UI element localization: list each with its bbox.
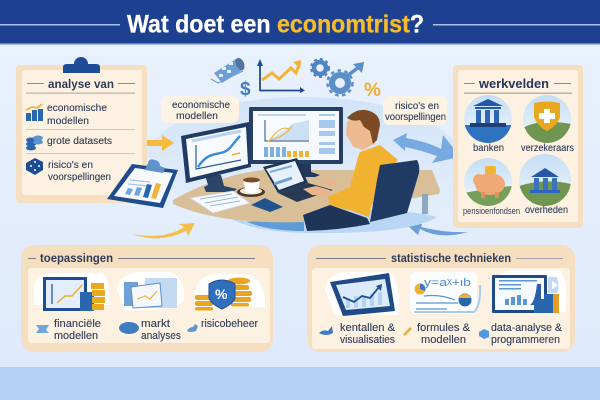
icon: verzekeraars <box>523 95 571 143</box>
arrow: blue bottom <box>407 224 468 235</box>
header bar <box>0 0 600 44</box>
text: formules & modellen: modellen <box>421 334 466 346</box>
text: economische modellen: economische <box>47 102 107 114</box>
text: markt analyses: analyses <box>141 330 181 342</box>
text: financiele modellen: financiële <box>54 318 101 330</box>
icon: tablet chart <box>325 272 399 316</box>
central background blob <box>146 97 470 234</box>
text: banken: banken <box>473 142 504 154</box>
icon: formulas: y=aᵡ+ιb <box>424 277 471 289</box>
arrow: yellow to monitor <box>147 135 174 151</box>
heading: toepassingen: toepassingen <box>40 251 113 265</box>
icon: shield and coins: % <box>215 286 228 302</box>
text: data-analyse & programmeren <box>479 322 563 346</box>
icons above desk <box>211 56 381 101</box>
icon: formulas <box>410 272 480 314</box>
text: markt analyses <box>119 318 181 342</box>
callout: risico's en voorspellingen <box>383 96 447 125</box>
icon: bar chart <box>26 104 43 121</box>
floor shadow <box>230 210 437 233</box>
callout: economische modellen: economische <box>172 100 230 111</box>
heading: werkvelden: werkvelden <box>478 76 549 91</box>
text: financiele modellen <box>36 318 101 342</box>
text: grote datasets: grote datasets <box>47 135 112 147</box>
text: overheden: overheden <box>525 204 568 216</box>
text: markt analyses: markt <box>141 318 170 330</box>
icon: dollar: $ <box>240 79 251 100</box>
chair <box>370 160 419 222</box>
panel: toepassingen <box>21 245 273 352</box>
text: financiele modellen: modellen <box>54 330 98 342</box>
clipboard <box>107 159 178 208</box>
icon: overheden <box>519 154 571 206</box>
icon: percent: % <box>364 80 381 101</box>
icon: gear with arrow <box>328 62 364 96</box>
icon: pensioenfondsen <box>464 158 512 206</box>
monitor left <box>181 122 251 192</box>
text: kentallen & visualisaties: visualisaties <box>340 334 395 346</box>
icon: data stack <box>26 136 43 150</box>
bottom band <box>0 367 600 400</box>
icon: market analyses <box>117 272 184 310</box>
icon: dashboard <box>492 270 566 313</box>
icon: shield and coins <box>195 274 265 310</box>
heading: analyse van: analyse van <box>48 77 114 91</box>
panel: werkvelden <box>453 65 583 228</box>
text: kentallen & visualisaties <box>319 322 396 346</box>
panel: analyse van: voorspellingen <box>48 171 111 183</box>
desk <box>173 170 440 222</box>
text: data-analyse & programmeren: programmeren <box>491 334 560 346</box>
icon: small gear <box>311 59 329 77</box>
icon: data cylinder <box>211 56 246 83</box>
icon: financial chart <box>34 273 110 311</box>
icon: banken <box>464 95 512 143</box>
arrow: yellow bottom <box>132 223 195 238</box>
text: verzekeraars: verzekeraars <box>521 143 574 154</box>
text: risico's en voorspellingen: risico's en <box>48 159 93 171</box>
heading: statistische technieken: statistische technieken <box>391 251 511 265</box>
monitor right <box>249 107 343 177</box>
icon: dice <box>26 158 43 175</box>
text: kentallen & visualisaties: kentallen & <box>340 322 396 334</box>
text: formules & modellen <box>404 322 471 346</box>
text: pensioenfondsen: pensioenfondsen <box>463 206 520 216</box>
callout: risico's en voorspellingen: risico's en <box>395 101 439 112</box>
icon: line chart <box>257 59 305 93</box>
laptop <box>263 158 333 202</box>
text: risicobeheer: risicobeheer <box>201 318 258 330</box>
person head <box>346 110 380 150</box>
panel: statistische technieken <box>307 245 575 352</box>
hands <box>303 179 338 196</box>
desk scene <box>173 107 440 233</box>
shirt <box>328 145 398 217</box>
title: Wat doet een economtrist? <box>127 10 424 38</box>
calculator <box>251 198 283 212</box>
callout: economische modellen: modellen <box>176 111 218 122</box>
coffee cup <box>237 178 265 197</box>
callout: risico's en voorspellingen: voorspellingen <box>385 112 446 123</box>
text: data-analyse & programmeren: data-analyse & <box>491 322 563 334</box>
papers <box>190 191 250 213</box>
panel: analyse van: modellen <box>47 115 89 127</box>
text: formules & modellen: formules & <box>417 322 471 334</box>
text: risicobeheer <box>187 318 258 332</box>
panel: analyse van <box>16 57 147 203</box>
arrow: blue double <box>393 133 455 163</box>
clipboard clip <box>63 57 100 73</box>
callout: economische modellen <box>161 96 239 123</box>
trousers <box>303 205 370 231</box>
